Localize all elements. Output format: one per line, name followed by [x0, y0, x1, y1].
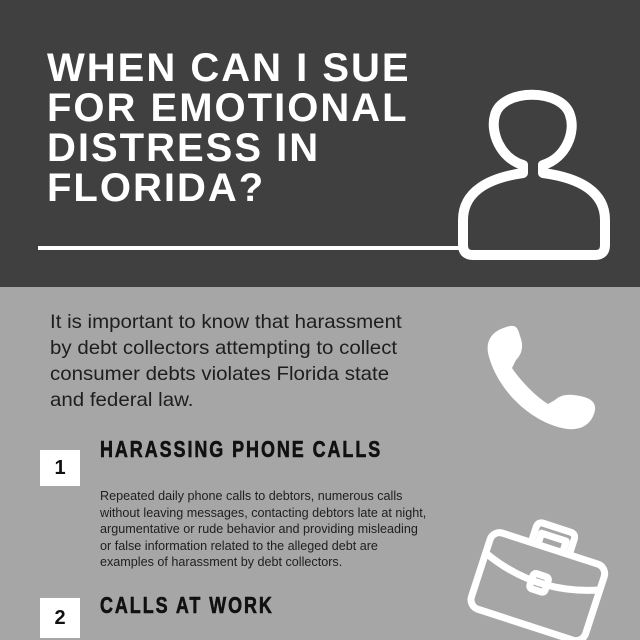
title: WHEN CAN I SUE FOR EMOTIONAL DISTRESS IN FLORIDA? — [47, 46, 411, 210]
icon: briefcase — [468, 519, 608, 640]
body 1: without leaving messages, contacting debtors late at night, — [100, 506, 426, 520]
body 1: argumentative or rude behavior and providing misleading — [100, 522, 418, 536]
number box 2 — [40, 598, 80, 638]
intro text — [50, 311, 402, 411]
body 1 — [100, 489, 426, 569]
number box 1 — [40, 450, 80, 486]
intro text: and federal law. — [50, 389, 193, 411]
number box 2: 2 — [54, 607, 66, 629]
body 1: Repeated daily phone calls to debtors, numerous calls — [100, 489, 402, 503]
heading 2: CALLS AT WORK — [100, 592, 274, 618]
intro text: It is important to know that harassment — [50, 311, 402, 333]
heading 1: HARASSING PHONE CALLS — [100, 436, 382, 462]
intro text: by debt collectors attempting to collect — [50, 337, 397, 359]
icon: phone — [488, 326, 596, 430]
body 1: examples of harassment by debt collectors. — [100, 555, 342, 569]
item 2 — [40, 592, 274, 638]
divider line — [38, 246, 468, 250]
body 1: or false information related to the alleged debt are — [100, 538, 378, 552]
intro text: consumer debts violates Florida state — [50, 363, 389, 385]
number box 1: 1 — [54, 457, 66, 479]
icon: person — [458, 90, 610, 260]
header panel — [0, 0, 640, 287]
item 1 — [40, 436, 426, 569]
